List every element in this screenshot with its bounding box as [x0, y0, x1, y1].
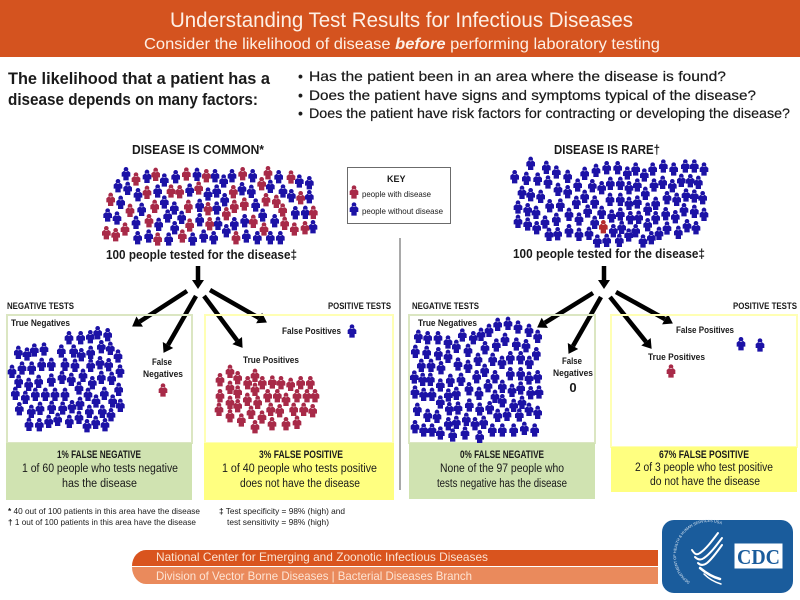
footer bar: division: Division of Vector Borne Diseases | Bacterial Diseases Branch	[156, 569, 472, 583]
people: true negatives	[8, 326, 125, 432]
result box: 1% false negative: 1% FALSE NEGATIVE	[57, 449, 141, 461]
result box: 67% false positive	[611, 447, 797, 492]
panel: negative tests, disease common: NEGATIVE TESTS	[7, 301, 74, 311]
footer bar: national center: National Center for Emerging and Zoonotic Infectious Diseases	[156, 550, 488, 564]
crowd: 100 people, disease rare	[510, 157, 708, 248]
center divider	[399, 238, 401, 490]
result box: 0% false negative: 0% FALSE NEGATIVE	[460, 449, 544, 461]
caption: 100 people tested, common: 100 people tested for the disease‡	[106, 248, 297, 262]
intro statement: The likelihood that a patient has a	[8, 69, 271, 88]
result box: 0% false negative: tests negative has the disease	[437, 478, 567, 490]
factor questions list: •	[298, 105, 303, 121]
subtitle: Consider the likelihood of disease before performing laboratory testing	[144, 36, 660, 53]
label: false negatives: False	[562, 356, 582, 366]
factor questions list: Does the patient have signs and symptoms typical of the disease?	[309, 87, 756, 103]
panel: positive tests, disease common: POSITIVE TESTS	[328, 301, 391, 311]
panel: negative tests, disease common	[6, 301, 192, 500]
arrows: common branch	[140, 266, 259, 345]
result box: 3% false positive: 3% FALSE POSITIVE	[259, 449, 343, 461]
label: true negatives: True Negatives	[418, 318, 477, 328]
panel: negative tests, disease rare	[409, 301, 595, 499]
seal text: DEPARTMENT OF HEALTH & HUMAN SERVICES USA	[673, 519, 722, 584]
footnotes: prevalence	[8, 506, 200, 527]
result box: 1% false negative	[6, 443, 192, 500]
key	[348, 168, 450, 224]
panel: negative tests, disease common: Negatives	[143, 369, 183, 379]
heading: disease is common: DISEASE IS COMMON*	[132, 142, 265, 157]
footnote: test specificity and sensitivity: ‡ Test specificity = 98% (high) and	[219, 506, 345, 516]
footnote: test specificity and sensitivity: test sensitivity = 98% (high)	[227, 517, 329, 527]
label: true negatives: True Negatives	[11, 318, 70, 328]
crowd: 100 people, disease common	[102, 166, 318, 246]
footnotes: prevalence: * 40 out of 100 patients in this area have the disease	[8, 506, 200, 516]
result box: 0% false negative	[409, 443, 595, 499]
footer bar: division	[132, 567, 658, 584]
icon: HHS eagle	[692, 533, 722, 584]
factor questions list	[298, 68, 790, 121]
footer bar: national center	[132, 550, 658, 566]
people: true negatives	[410, 317, 543, 443]
icon: person with disease	[350, 185, 358, 199]
label: true positives: True Positives	[243, 355, 299, 365]
label: true positives: True Positives	[648, 352, 705, 362]
result box: 67% false positive: 67% FALSE POSITIVE	[659, 449, 749, 461]
panel: negative tests, disease rare: NEGATIVE TESTS	[412, 301, 479, 311]
people: false positives	[737, 337, 764, 352]
key: KEY	[387, 174, 406, 184]
person: true positive	[667, 364, 675, 378]
label: false negatives: False	[152, 357, 172, 367]
icon: person without disease	[350, 202, 358, 216]
result box: 1% false negative: 1 of 60 people who tests negative	[22, 463, 178, 475]
factor questions list: Does the patient have risk factors for contracting or developing the disease?	[309, 105, 790, 121]
count: zero false negatives: 0	[569, 380, 577, 395]
arrows: rare branch	[545, 266, 665, 346]
label: people with disease: people with disease	[362, 189, 431, 199]
footnote: test specificity and sensitivity	[219, 506, 345, 527]
intro statement: disease depends on many factors:	[8, 90, 258, 109]
result box: 3% false positive: 1 of 40 people who tests positive	[222, 463, 377, 475]
label: false positives: False Positives	[676, 325, 734, 335]
intro statement	[8, 69, 271, 109]
result box: 1% false negative: has the disease	[62, 478, 137, 490]
factor questions list: Has the patient been in an area where the disease is found?	[309, 68, 726, 84]
factor questions list: •	[298, 68, 303, 84]
title: Understanding Test Results for Infectious Diseases	[170, 9, 633, 32]
person: false negative	[159, 383, 167, 397]
header banner	[0, 0, 800, 57]
logo: HHS and CDC	[662, 519, 793, 593]
heading: disease is rare: DISEASE IS RARE†	[554, 142, 660, 157]
result box: 0% false negative: None of the 97 people who	[440, 463, 564, 475]
factor questions list: •	[298, 87, 303, 103]
CDC wordmark: CDC	[737, 545, 780, 569]
panel: positive tests, disease rare	[611, 301, 797, 492]
result box: 3% false positive: does not have the disease	[240, 478, 360, 490]
caption: 100 people tested, rare: 100 people tested for the disease‡	[513, 247, 705, 261]
result box: 67% false positive: do not have the disease	[650, 476, 760, 488]
people: true positives	[215, 365, 319, 433]
result box: 67% false positive: 2 of 3 people who test positive	[635, 462, 773, 474]
panel: positive tests, disease common	[204, 301, 394, 500]
label: false positives: False Positives	[282, 326, 341, 336]
result box: 3% false positive	[204, 443, 394, 500]
person: false positive	[348, 324, 356, 338]
footnotes: prevalence: † 1 out of 100 patients in this area have the disease	[8, 517, 196, 527]
label: people without disease: people without disease	[362, 206, 443, 216]
panel: negative tests, disease rare: Negatives	[553, 368, 593, 378]
